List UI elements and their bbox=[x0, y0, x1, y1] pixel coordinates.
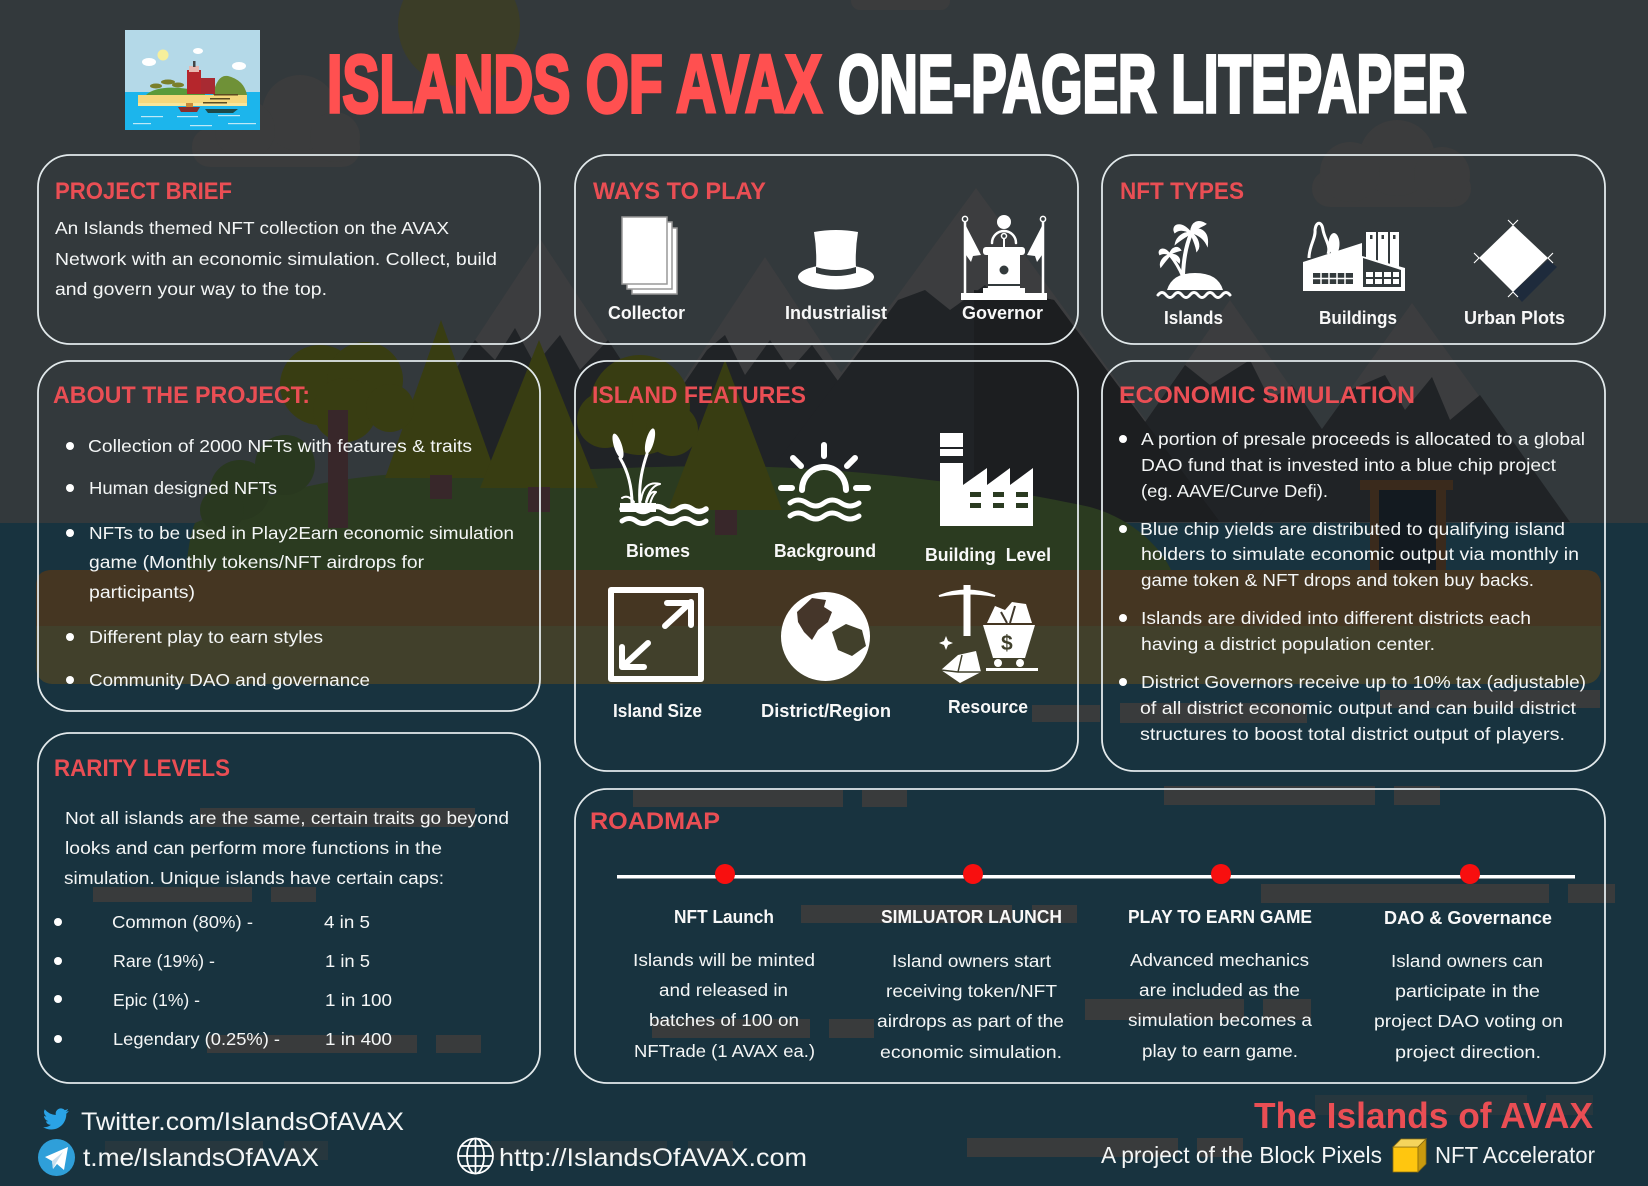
heading: about the project: ABOUT THE PROJECT: bbox=[53, 382, 310, 409]
label: island size: Island Size bbox=[613, 701, 702, 721]
panel: roadmap bbox=[575, 789, 1605, 1083]
milestone: nft launch: and released in bbox=[659, 980, 788, 1000]
milestone: play to earn game: simulation becomes a bbox=[1128, 1010, 1312, 1030]
text block: rarity intro: simulation. Unique islands have certain caps: bbox=[64, 868, 444, 888]
milestone: dao and governance bbox=[1374, 908, 1563, 1062]
heading: rarity levels: RARITY LEVELS bbox=[54, 755, 230, 782]
icon: factory buildings bbox=[1303, 223, 1405, 291]
list: rarity tiers: Epic (1%) - bbox=[113, 990, 200, 1010]
list: rarity tiers: 4 in 5 bbox=[324, 912, 370, 932]
milestone: simulator launch: Island owners start bbox=[892, 951, 1051, 971]
list: economic simulation bullets: having a district population center. bbox=[1141, 634, 1435, 654]
panel: economic simulation bbox=[1102, 361, 1605, 771]
label: buildings: Buildings bbox=[1319, 308, 1397, 328]
milestone: play to earn game: PLAY TO EARN GAME bbox=[1128, 907, 1312, 927]
milestone: dao and governance: participate in the bbox=[1395, 981, 1540, 1001]
list: economic simulation bullets bbox=[1119, 429, 1586, 744]
list: rarity tiers: 1 in 400 bbox=[325, 1029, 392, 1049]
icon: governor podium bbox=[961, 215, 1047, 300]
list: project bullets bbox=[66, 436, 514, 690]
milestone: nft launch: Islands will be minted bbox=[633, 950, 815, 970]
heading: ways to play: WAYS TO PLAY bbox=[593, 178, 766, 205]
text block: rarity intro bbox=[64, 808, 509, 888]
icon: building level factory bbox=[940, 433, 1033, 526]
icon: resource pickaxe and cart: $ bbox=[1001, 632, 1013, 655]
panel: rarity levels bbox=[38, 733, 540, 1083]
list: economic simulation bullets: Blue chip yields are distributed to qualifying island bbox=[1140, 519, 1565, 539]
list: economic simulation bullets: structures to boost total district output of players. bbox=[1140, 724, 1565, 744]
icon: yellow cube bbox=[1393, 1139, 1426, 1172]
label: resource: Resource bbox=[948, 697, 1028, 717]
icon: website globe bbox=[458, 1138, 493, 1174]
milestone: simulator launch: receiving token/NFT bbox=[886, 981, 1057, 1001]
milestone: play to earn game bbox=[1128, 907, 1312, 1061]
milestone: simulator launch bbox=[877, 907, 1064, 1062]
list: rarity tiers: 1 in 5 bbox=[325, 951, 370, 971]
icon: urban plot diamond bbox=[1474, 220, 1557, 302]
title: ISLANDS OF AVAX bbox=[327, 39, 822, 130]
icon: biomes reeds bbox=[610, 427, 706, 524]
label: collector: Collector bbox=[608, 303, 685, 323]
heading: island features: ISLAND FEATURES bbox=[592, 382, 806, 409]
milestone: dao and governance: DAO & Governance bbox=[1384, 908, 1552, 928]
list: rarity tiers: Legendary (0.25%) - bbox=[113, 1029, 280, 1049]
title bbox=[327, 39, 1466, 130]
icon: district globe bbox=[781, 592, 870, 681]
list: project bullets: Community DAO and governance bbox=[89, 670, 370, 690]
milestone: simulator launch: SIMLUATOR LAUNCH bbox=[881, 907, 1062, 927]
heading: project brief: PROJECT BRIEF bbox=[55, 178, 232, 205]
text block: project brief bbox=[55, 218, 497, 299]
list: project bullets: participants) bbox=[89, 582, 195, 602]
list: economic simulation bullets: (eg. AAVE/Curve Defi). bbox=[1141, 481, 1328, 501]
list: project bullets: NFTs to be used in Play2Earn economic simulation bbox=[89, 523, 514, 543]
milestone: nft launch: batches of 100 on bbox=[649, 1010, 799, 1030]
label: urban plots: Urban Plots bbox=[1464, 308, 1565, 328]
milestone: nft launch: NFT Launch bbox=[674, 907, 774, 927]
link: telegram: t.me/IslandsOfAVAX bbox=[83, 1144, 319, 1172]
panel: ways to play bbox=[575, 155, 1078, 344]
milestone: nft launch: NFTrade (1 AVAX ea.) bbox=[634, 1041, 815, 1061]
heading: economic simulation: ECONOMIC SIMULATION bbox=[1119, 382, 1415, 409]
label: biomes: Biomes bbox=[626, 541, 690, 561]
milestone: dao and governance: Island owners can bbox=[1391, 951, 1543, 971]
milestone: play to earn game: Advanced mechanics bbox=[1130, 950, 1309, 970]
icon: island size arrows bbox=[611, 590, 701, 679]
label: islands: Islands bbox=[1164, 308, 1223, 328]
list: project bullets: Human designed NFTs bbox=[89, 478, 277, 498]
icon: resource pickaxe and cart bbox=[939, 585, 1038, 683]
footer credit right: NFT Accelerator bbox=[1435, 1142, 1595, 1168]
milestone: dao and governance: project DAO voting on bbox=[1374, 1011, 1563, 1031]
link: website: http://IslandsOfAVAX.com bbox=[499, 1144, 807, 1172]
icon: telegram bbox=[38, 1139, 75, 1176]
text block: project brief: An Islands themed NFT collection on the AVAX bbox=[55, 218, 449, 238]
list: economic simulation bullets: Islands are divided into different districts each bbox=[1141, 608, 1531, 628]
panel: about the project bbox=[38, 361, 540, 711]
footer credit left: A project of the Block Pixels bbox=[1101, 1142, 1382, 1168]
timeline with milestones bbox=[617, 864, 1575, 884]
heading: roadmap: ROADMAP bbox=[590, 808, 720, 835]
panel: nft types bbox=[1102, 155, 1605, 344]
icon: collector cards bbox=[622, 217, 677, 294]
list: rarity tiers bbox=[54, 912, 392, 1049]
panel: project brief bbox=[38, 155, 540, 344]
icon: twitter bird bbox=[43, 1108, 69, 1129]
panel: island features bbox=[575, 361, 1078, 771]
list: economic simulation bullets: of all district economic output and can build district bbox=[1140, 698, 1576, 718]
label: district region: District/Region bbox=[761, 701, 891, 721]
label: governor: Governor bbox=[962, 303, 1043, 323]
label: building level: Building Level bbox=[925, 545, 1051, 565]
icon: top hat bbox=[798, 230, 874, 290]
milestone: play to earn game: play to earn game. bbox=[1142, 1041, 1298, 1061]
milestone: nft launch bbox=[633, 907, 815, 1061]
label: background: Background bbox=[774, 541, 876, 561]
list: rarity tiers: Rare (19%) - bbox=[113, 951, 215, 971]
text block: project brief: and govern your way to the top. bbox=[55, 279, 327, 299]
milestone: simulator launch: economic simulation. bbox=[880, 1042, 1062, 1062]
text block: project brief: Network with an economic simulation. Collect, build bbox=[55, 249, 497, 269]
list: economic simulation bullets: game token & NFT drops and token buy backs. bbox=[1141, 570, 1534, 590]
list: project bullets: game (Monthly tokens/NFT airdrops for bbox=[89, 552, 424, 572]
list: project bullets: Different play to earn styles bbox=[89, 627, 323, 647]
logo: island illustration bbox=[125, 30, 260, 130]
text block: rarity intro: Not all islands are the same, certain traits go beyond bbox=[65, 808, 509, 828]
list: rarity tiers: Common (80%) - bbox=[112, 912, 253, 932]
icon: background sunrise bbox=[781, 445, 868, 519]
milestone: dao and governance: project direction. bbox=[1395, 1042, 1541, 1062]
list: project bullets: Collection of 2000 NFTs with features & traits bbox=[88, 436, 472, 456]
footer brand name: The Islands of AVAX bbox=[1254, 1095, 1593, 1136]
list: economic simulation bullets: holders to simulate economic output via monthly in bbox=[1141, 544, 1579, 564]
list: economic simulation bullets: DAO fund that is invested into a blue chip project bbox=[1141, 455, 1556, 475]
text block: rarity intro: looks and can perform more functions in the bbox=[65, 838, 442, 858]
list: rarity tiers: 1 in 100 bbox=[325, 990, 392, 1010]
list: economic simulation bullets: District Governors receive up to 10% tax (adjustable) bbox=[1141, 672, 1586, 692]
heading: nft types: NFT TYPES bbox=[1120, 178, 1244, 205]
milestone: simulator launch: airdrops as part of the bbox=[877, 1011, 1064, 1031]
list: economic simulation bullets: A portion of presale proceeds is allocated to a global bbox=[1141, 429, 1585, 449]
icon: palm island bbox=[1158, 222, 1230, 298]
milestone: play to earn game: are included as the bbox=[1139, 980, 1300, 1000]
link: twitter: Twitter.com/IslandsOfAVAX bbox=[81, 1108, 404, 1136]
label: industrialist: Industrialist bbox=[785, 303, 887, 323]
